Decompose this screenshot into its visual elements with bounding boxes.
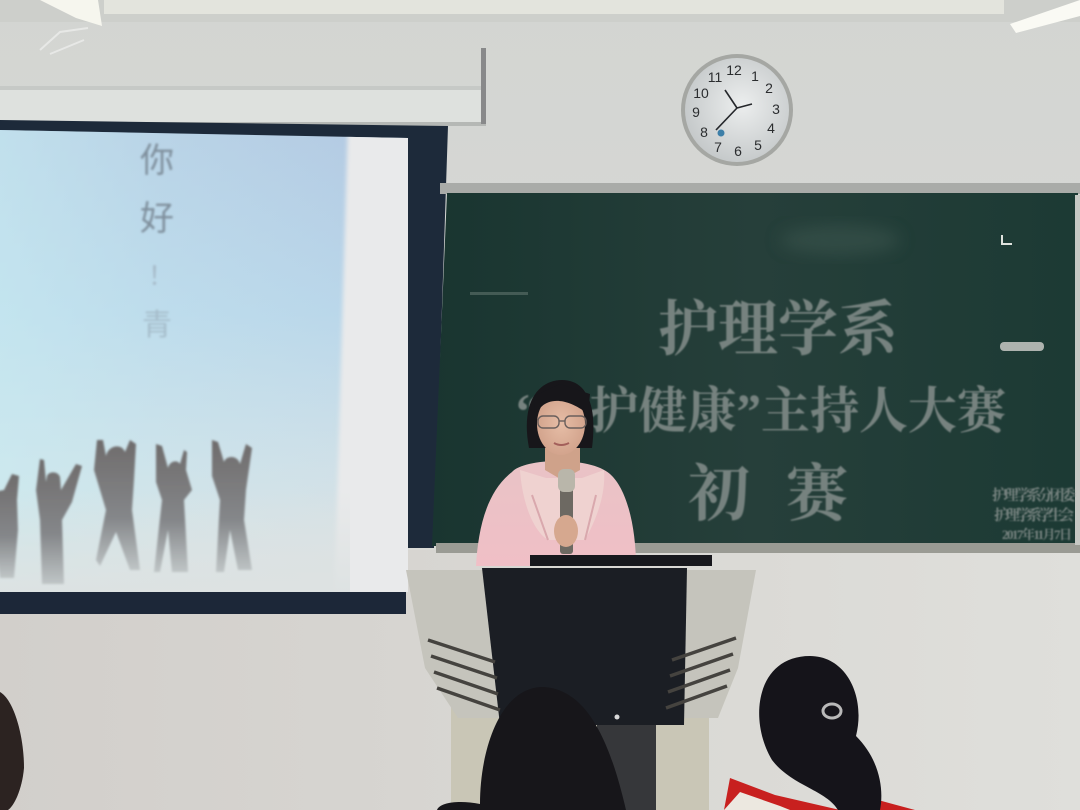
slide greeting text <box>140 142 174 342</box>
audience member right <box>724 656 915 810</box>
silhouettes of jumping people <box>0 440 252 584</box>
wall clock: 1 <box>751 68 759 84</box>
audience member centre <box>437 687 626 810</box>
chalk signature <box>992 486 1077 542</box>
wall clock: 8 <box>700 124 708 140</box>
wall clock: 6 <box>734 143 742 159</box>
wall clock: 11 <box>708 69 722 85</box>
wall clock: 12 <box>726 62 742 78</box>
lectern vents <box>428 638 736 710</box>
wall clock: 9 <box>692 104 700 120</box>
wall clock: 2 <box>765 80 773 96</box>
chalk writing: 初赛 <box>688 460 853 529</box>
chalk writing <box>516 297 1010 529</box>
wall clock <box>681 54 793 166</box>
wall clock: 3 <box>772 101 780 117</box>
chalkboard <box>432 183 1080 553</box>
slide greeting text: ！ <box>148 261 174 291</box>
chalk signature: 护理学系学生会 <box>994 506 1074 524</box>
face <box>537 393 585 455</box>
slide greeting text: 你 <box>140 142 174 180</box>
lower wall <box>0 550 1080 810</box>
chalk signature: 护理学系分团委 <box>992 486 1077 504</box>
neck <box>545 448 580 480</box>
projector screen <box>0 120 448 614</box>
hoodie <box>476 461 636 566</box>
chalk writing: “守护健康”主持人大赛 <box>516 383 1010 439</box>
slide greeting text: 青 <box>142 309 172 342</box>
audience <box>0 656 915 810</box>
audience member left edge <box>0 692 24 810</box>
projector screen housing <box>0 48 486 126</box>
slide greeting text: 好 <box>140 200 174 238</box>
presenter <box>476 380 636 566</box>
ceiling <box>0 0 1080 54</box>
lectern <box>406 555 756 810</box>
glasses <box>538 416 586 428</box>
wall clock: 5 <box>754 137 762 153</box>
chalk writing: 护理学系 <box>658 297 899 363</box>
wall clock: 10 <box>693 85 709 101</box>
wall clock: 7 <box>714 139 722 155</box>
hand and microphone <box>560 488 573 554</box>
hair <box>527 380 593 448</box>
wall clock: 4 <box>767 120 775 136</box>
chalk signature: 2017年11月7日 <box>1002 527 1072 542</box>
